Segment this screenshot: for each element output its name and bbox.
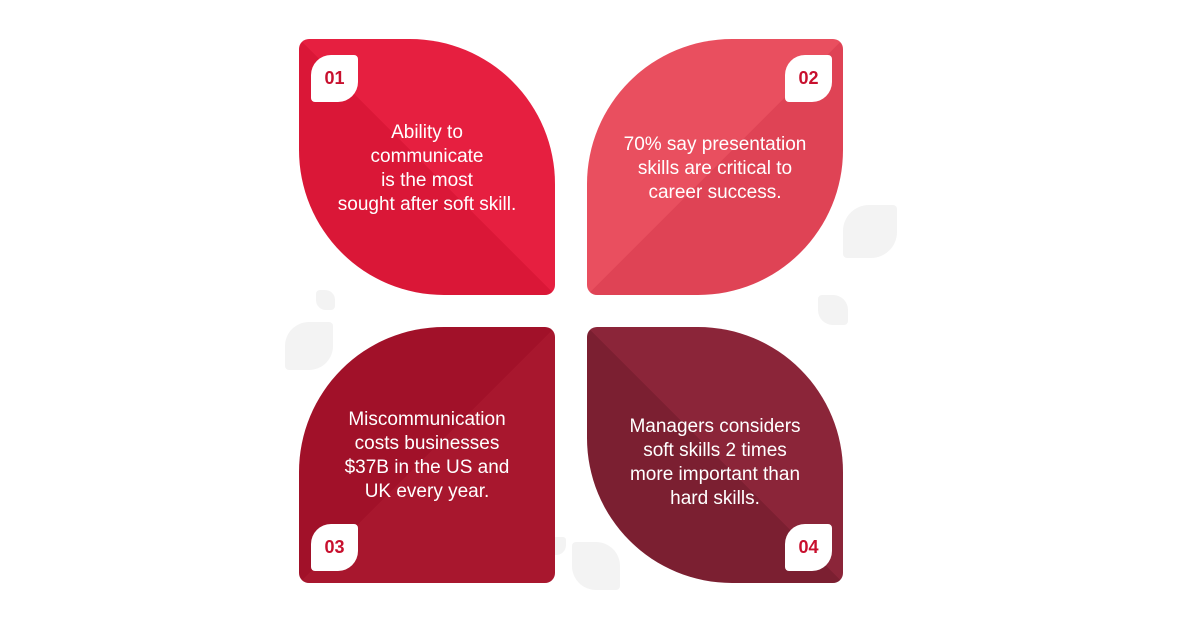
decorative leaf xyxy=(285,322,333,370)
text 1 xyxy=(338,122,516,215)
badge 02: 02 xyxy=(798,68,819,88)
text 4: soft skills 2 times xyxy=(643,440,787,461)
text 2: career success. xyxy=(648,182,782,203)
text 3: UK every year. xyxy=(365,481,489,502)
text 1: is the most xyxy=(381,170,473,191)
badge 01 xyxy=(311,55,358,102)
text 3: Miscommunication xyxy=(348,409,506,430)
badge 02 xyxy=(785,55,832,102)
text 4: Managers considers xyxy=(629,416,801,437)
decorative leaf xyxy=(546,537,566,555)
text 4 xyxy=(629,416,801,509)
text 2: skills are critical to xyxy=(638,158,792,179)
badge 03: 03 xyxy=(324,537,345,557)
text 2: 70% say presentation xyxy=(624,134,806,155)
text 1: sought after soft skill. xyxy=(338,194,516,215)
decorative leaf xyxy=(818,295,848,325)
badge 01: 01 xyxy=(324,68,345,88)
badge 03 xyxy=(311,524,358,571)
text 1: communicate xyxy=(370,146,484,167)
panel 3 xyxy=(299,327,555,583)
decorative leaf xyxy=(572,542,620,590)
badge 04 xyxy=(785,524,832,571)
decorative leaf xyxy=(316,290,335,310)
panel 4 xyxy=(587,327,843,583)
text 4: more important than xyxy=(630,464,800,485)
text 2 xyxy=(624,134,806,203)
text 3: costs businesses xyxy=(355,433,499,454)
badge 04: 04 xyxy=(798,537,819,557)
text 3: $37B in the US and xyxy=(345,457,509,478)
text 3 xyxy=(344,409,509,502)
text 4: hard skills. xyxy=(670,488,760,509)
decorative leaf xyxy=(843,205,897,258)
panel 1 xyxy=(299,39,555,295)
panel 2 xyxy=(587,39,843,295)
text 1: Ability to xyxy=(391,122,463,143)
